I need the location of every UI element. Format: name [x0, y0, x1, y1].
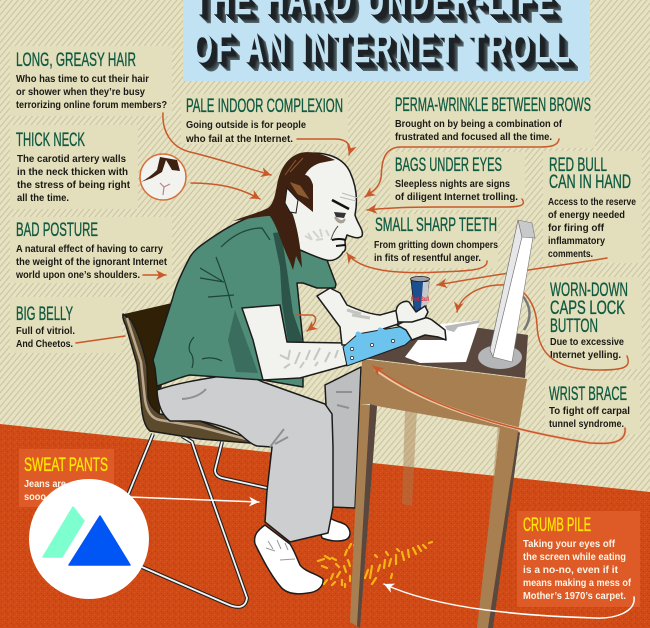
forearm stubble — [347, 310, 370, 318]
panel: small sharp teeth: From gritting down chompers — [374, 240, 498, 251]
panel: worn-down caps lock: Internet yelling. — [550, 350, 621, 361]
t-shirt — [153, 210, 336, 387]
panel: big belly: BIG BELLY — [16, 304, 73, 325]
panel: bags under eyes: of diligent Internet trolling. — [395, 192, 518, 203]
panel: crumb pile: CRUMB PILE — [523, 515, 591, 536]
paper — [405, 320, 480, 363]
panel: worn-down caps lock: BUTTON — [550, 316, 598, 337]
panel: long greasy hair: LONG, GREASY HAIR — [16, 50, 136, 71]
chair front legs — [128, 434, 247, 607]
desk front — [360, 359, 527, 431]
panel: long greasy hair: or shower when they’re busy — [16, 87, 145, 98]
skin — [285, 153, 362, 261]
panel: worn-down caps lock — [545, 277, 642, 369]
panel: pale indoor complexion: PALE INDOOR COMPLEXION — [186, 96, 343, 117]
arrow: big belly to shirt — [296, 315, 316, 331]
gripping hand — [396, 301, 428, 322]
neck and head — [233, 152, 362, 270]
panel: crumb pile: Mother’s 1970’s carpet. — [523, 591, 626, 602]
panel: bags under eyes: Sleepless nights are signs — [395, 179, 510, 190]
sock folds — [266, 540, 295, 560]
shirt lower shade — [228, 310, 258, 373]
panel: bad posture: the weight of the ignorant Internet — [16, 257, 168, 268]
panel: thick neck: in the neck thicken with — [17, 167, 128, 178]
wrist brace — [343, 326, 413, 366]
pants creases — [182, 389, 352, 447]
panel: sweat pants: sooo — [24, 492, 46, 503]
brace holes — [350, 339, 395, 360]
panel: small sharp teeth: SMALL SHARP TEETH — [375, 215, 497, 236]
arrow: sweat pants callout — [130, 497, 259, 502]
shirt shade stripe — [273, 232, 303, 342]
panel: pale indoor complexion: Going outside is for people — [186, 120, 306, 131]
panel: wrist brace: To fight off carpal — [549, 406, 630, 417]
eyebrow — [332, 200, 349, 209]
panel: crumb pile: the screen while eating — [523, 552, 626, 563]
panel: thick neck: THICK NECK — [16, 130, 85, 151]
logo: mint parallelogram — [43, 507, 84, 557]
panel: wrist brace: tunnel syndrome. — [549, 419, 624, 430]
panel: red bull: Access to the reserve — [548, 197, 636, 208]
arrow: red bull callout — [437, 258, 607, 285]
panel: wrist brace — [545, 380, 640, 434]
front sock — [255, 525, 323, 594]
arrow: caps lock callout — [457, 285, 628, 370]
arrow: wrist brace callout — [373, 366, 625, 443]
panel: red bull — [543, 151, 642, 263]
panel: thick neck: all the time. — [17, 193, 69, 204]
desk right leg — [477, 427, 518, 628]
panel: perma-wrinkle: Brought on by being a combination of — [395, 119, 563, 130]
panel: perma-wrinkle: frustrated and focused all the time. — [395, 132, 552, 143]
eye and bag — [334, 212, 346, 218]
stubble — [305, 229, 329, 240]
panel: sweat pants: Jeans are — [24, 479, 66, 490]
arrow: long greasy hair callout — [163, 113, 271, 175]
panel: bad posture: world upon one’s shoulders. — [15, 270, 140, 281]
right forearm — [242, 305, 347, 380]
inset veins — [160, 183, 170, 195]
logo: blue triangle — [69, 516, 130, 565]
desk left leg — [350, 404, 377, 628]
far sock — [318, 518, 350, 541]
chair shell — [123, 314, 258, 443]
arrow: bad posture callout — [143, 274, 166, 276]
panel: crumb pile — [517, 511, 640, 607]
panel: red bull: RED BULL — [549, 155, 607, 176]
brow wrinkles — [340, 193, 358, 201]
panel: small sharp teeth — [368, 214, 498, 268]
panel: thick neck — [10, 125, 138, 209]
cheek lines — [331, 226, 338, 240]
brace straps — [358, 330, 392, 341]
panel: big belly — [10, 297, 122, 353]
panel: worn-down caps lock: Due to excessive — [550, 337, 624, 348]
monitor faces — [490, 220, 522, 357]
logo badge — [29, 479, 149, 599]
panel: small sharp teeth: in fits of resentful anger. — [374, 253, 481, 264]
arrow: teeth callout — [347, 253, 487, 273]
arrow: pale complexion callout — [297, 139, 350, 155]
panel: long greasy hair: terrorizing online forum members? — [16, 100, 167, 111]
ear — [285, 188, 298, 213]
panel: perma-wrinkle — [390, 95, 595, 148]
panel: long greasy hair: Who has time to cut their hair — [16, 74, 149, 85]
chair back — [124, 303, 172, 425]
hair highlight — [285, 158, 308, 198]
panel: bad posture: BAD POSTURE — [16, 220, 98, 241]
panel: sweat pants: SWEAT PANTS — [24, 455, 108, 476]
red bull can — [410, 276, 430, 317]
monitor stand — [478, 345, 522, 369]
arm hair — [280, 348, 338, 368]
panel: thick neck: The carotid artery walls — [17, 154, 126, 165]
panel: long greasy hair — [10, 46, 172, 116]
panel: pale indoor complexion: who fail at the Internet. — [185, 134, 293, 145]
inset hair — [141, 157, 180, 182]
panel: crumb pile: is a no-no, even if it — [523, 565, 619, 576]
paper shadow edge — [445, 320, 480, 332]
chair — [123, 303, 267, 607]
desk rear legs — [402, 410, 505, 520]
arrow: crumb pile callout — [384, 584, 634, 618]
arrow: bags callout — [367, 199, 523, 210]
far leg of sweat pants — [325, 367, 361, 508]
monitor — [478, 220, 535, 369]
panel: sweat pants — [19, 449, 114, 507]
typing hand — [397, 318, 446, 340]
desk — [350, 327, 528, 628]
panel: big belly: And Cheetos. — [16, 339, 73, 350]
panel: big belly: Full of vitriol. — [16, 326, 75, 337]
panel: bad posture: A natural effect of having to carry — [16, 244, 163, 255]
desk top — [362, 327, 528, 378]
panel: crumb pile: Taking your eyes off — [523, 539, 616, 550]
arrow: thick neck callout — [191, 183, 260, 199]
panel: bad posture — [10, 217, 172, 283]
red bull can: Red Bull — [411, 297, 429, 303]
panel: bags under eyes: BAGS UNDER EYES — [395, 155, 502, 176]
left arm — [317, 288, 398, 345]
panel: red bull: of energy needed — [548, 210, 625, 221]
front sweat pants leg — [157, 373, 333, 542]
panel: red bull: for firing off — [548, 223, 605, 234]
panel: thick neck: the stress of being right — [17, 180, 131, 191]
title — [183, 0, 590, 81]
inset: neck close-up circle — [140, 154, 186, 200]
panel: pale indoor complexion — [181, 94, 348, 145]
carpet floor — [0, 424, 650, 628]
monitor cable — [522, 295, 530, 330]
panel: red bull: comments. — [548, 249, 593, 260]
hair — [233, 152, 335, 270]
line: big belly callout — [76, 336, 125, 343]
chair rear legs — [215, 442, 267, 488]
title: OF AN INTERNET TROLL — [192, 24, 573, 72]
shirt folds — [189, 228, 270, 368]
crumb pile — [318, 542, 432, 587]
shirt body — [153, 210, 336, 387]
arrow: perma-wrinkle callout — [365, 139, 559, 197]
panel: red bull: inflammatory — [548, 236, 605, 247]
panel: crumb pile: means making a mess of — [523, 578, 632, 589]
mouth — [332, 239, 346, 246]
panel: bags under eyes — [390, 152, 525, 210]
